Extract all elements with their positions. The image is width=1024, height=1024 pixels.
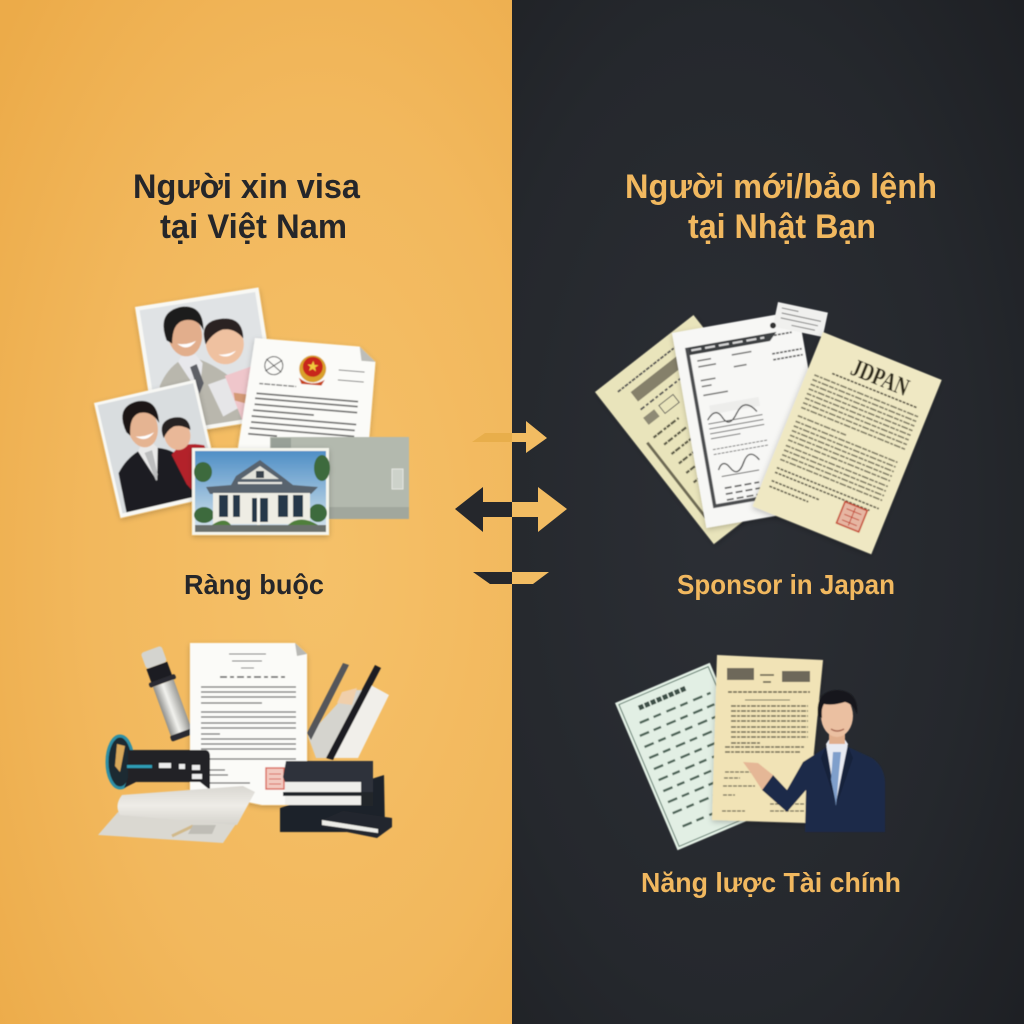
document: green financial statement <box>615 663 772 850</box>
document: JDPAN certificate <box>753 332 942 554</box>
panel: right dark background <box>512 0 1024 1024</box>
heading: left: tại Việt Nam <box>160 208 347 246</box>
label: Sponsor in Japan: Sponsor in Japan <box>677 569 895 600</box>
house roof <box>206 460 318 494</box>
heading: left: Người xin visa <box>133 168 361 206</box>
illustration: sponsor documents <box>595 301 942 554</box>
heading: right: tại Nhật Bạn <box>688 208 876 246</box>
label: Ràng buộc: Ràng buộc <box>184 569 324 600</box>
icon: stamp tube <box>138 645 196 742</box>
document: small card <box>769 301 828 339</box>
illustration: financial documents and sponsor <box>615 655 885 850</box>
heading: right: Người mới/bảo lệnh <box>625 168 937 206</box>
emblem: national crest <box>298 354 327 386</box>
emblem outline <box>264 356 284 375</box>
photo: building wall <box>270 437 409 519</box>
panel: left gold background <box>0 0 512 1024</box>
document: letter with stamp <box>190 643 307 805</box>
figure: businessman pointing <box>743 690 885 832</box>
house walls <box>213 493 310 524</box>
label: Năng lược Tài chính: Năng lược Tài chính <box>641 867 901 898</box>
arrow: top, pointing right <box>472 421 547 453</box>
document: cream contract <box>712 655 823 823</box>
stamp <box>836 502 867 532</box>
document: Vietnamese official letter with emblem <box>238 337 377 460</box>
arrow: bottom, partial head <box>473 572 549 584</box>
photo: Vietnamese house <box>192 448 330 535</box>
document: cream back page <box>595 315 812 544</box>
arrows: central exchange arrows <box>455 421 567 584</box>
heading: right <box>625 168 937 246</box>
trees <box>194 455 330 523</box>
icon: black machine with teal ring <box>107 736 210 790</box>
hedge <box>212 520 318 525</box>
icon: feather pens <box>307 663 389 760</box>
icon: stack of books <box>280 761 392 838</box>
arrow: middle, double headed <box>455 487 567 532</box>
heading: left <box>133 168 361 246</box>
document: white form <box>672 311 832 528</box>
photo: father and child, light suit <box>135 287 279 437</box>
photo: father and child, dark suit <box>94 380 222 518</box>
illustration: desk documents and stationery <box>98 643 392 843</box>
illustration: family ties documents collage <box>94 287 409 535</box>
document: JDPAN certificate: JDPAN <box>847 354 913 402</box>
icon: folded paper stack <box>98 786 255 843</box>
